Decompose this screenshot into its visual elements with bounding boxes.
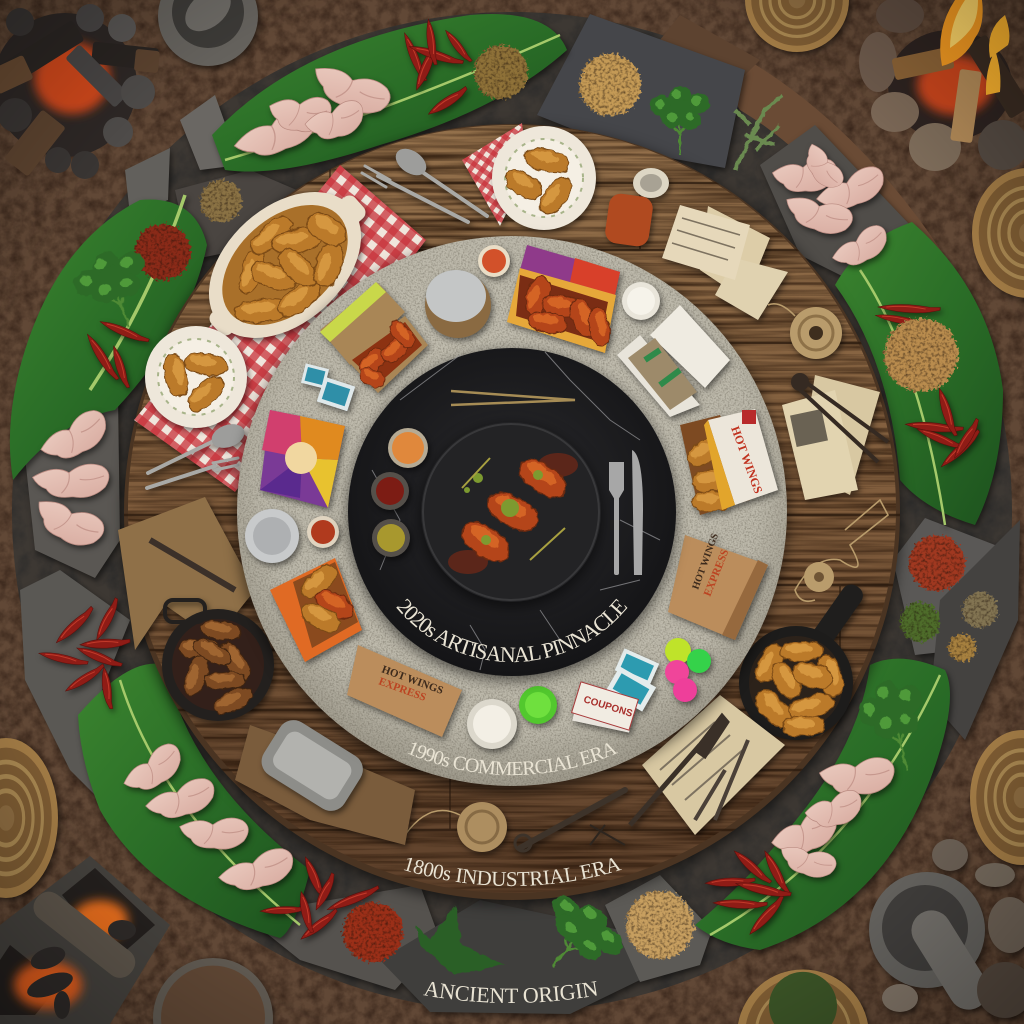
cast iron pan with wings [162, 600, 274, 721]
chilies: right upper [875, 302, 940, 328]
charcoal fire top left [0, 4, 160, 179]
kraft paper bag lower: HOT WINGS [380, 664, 445, 697]
coupons: COUPONS [582, 694, 634, 720]
raw wings groups [29, 48, 896, 892]
metal lunch box [256, 714, 369, 817]
hot wings express box [680, 409, 778, 515]
chilies: right [905, 387, 983, 469]
raw wings: top leaf [229, 48, 395, 162]
colourful box with red wings [507, 245, 620, 353]
white and green sauce cups [467, 686, 557, 749]
second newspaper and tools [630, 695, 785, 835]
twine spool top right [768, 304, 842, 359]
leaf: lower right [695, 659, 950, 950]
charcoal stone stove bottom left [0, 856, 170, 1024]
chilies: bottom [260, 855, 381, 942]
chilies: bottom right [705, 847, 791, 937]
leaf: lower left [78, 664, 310, 938]
fresh herbs [67, 86, 939, 994]
plated artisanal wings [448, 453, 578, 574]
kraft paper bag lower: EXPRESS [377, 676, 428, 704]
dish of fried tenders [181, 163, 389, 367]
open wing box tan lid [320, 282, 428, 393]
cutlery on the wood [147, 143, 487, 488]
orange wing box lower left [270, 558, 362, 662]
chilies: left [38, 598, 130, 709]
purple swirl box [260, 410, 345, 508]
twine and wire on the wood [795, 500, 888, 601]
era label: 1990s commercial era: 1990s COMMERCIAL ERA [408, 742, 618, 776]
label: hot wings: HOT WINGS [728, 424, 766, 496]
kraft paper bag right: HOT WINGS [690, 532, 721, 591]
wooden disc: 1800s industrial era [120, 120, 900, 900]
leaf: top [212, 14, 567, 172]
white sauce cup [622, 282, 660, 320]
old newspaper and pliers [782, 373, 888, 500]
top plate with tenders [492, 126, 596, 230]
twine spool bottom [405, 802, 507, 852]
red gingham tablecloth [134, 123, 528, 492]
old scissors [515, 790, 625, 851]
chilies: top [402, 19, 472, 117]
era label: 1800s industrial era: 1800s INDUSTRIAL ERA [404, 858, 622, 886]
stone mortar and pestle bottom right [869, 839, 1024, 1018]
black marble disc: 2020s artisanal pinnacle [348, 348, 676, 676]
campfire top right [859, 0, 1024, 171]
neon game tokens [665, 638, 711, 702]
kraft paper bag right: EXPRESS [702, 548, 731, 598]
fine dining fork and knife [609, 450, 643, 575]
coupons [572, 648, 659, 733]
blue sauce packets [301, 363, 355, 411]
raw wings: lower right leaf [767, 748, 896, 887]
terrazzo disc: 1990s commercial era [237, 236, 787, 786]
foil lid and red sauce cup [245, 509, 339, 563]
leaf: right [835, 222, 1003, 525]
left plate with tenders [145, 326, 247, 428]
foil cup and red sauce [425, 245, 510, 338]
slate serving plate [421, 422, 601, 602]
chilies: upper left [85, 317, 149, 389]
raw wings: lower left leaf [116, 741, 295, 892]
sauce jar [604, 168, 669, 248]
raw wings: right slate [770, 138, 892, 270]
era label: 2020s artisanal pinnacle: 2020s ARTISANAL PINNACLE [396, 598, 628, 662]
open white snack box [617, 305, 730, 417]
spice powder piles [135, 45, 998, 962]
leaf: upper left [10, 195, 207, 480]
artisan sauce dishes [371, 428, 428, 557]
cast iron skillet with wings [739, 581, 867, 740]
burlap sacks [118, 497, 415, 845]
raw wings: left slate [29, 408, 112, 559]
era label: ancient origin: ANCIENT ORIGIN [423, 981, 597, 1003]
tweezers [451, 391, 575, 405]
recipe notes [662, 205, 788, 320]
kraft paper bag right [668, 532, 768, 640]
kraft paper bag lower [347, 645, 462, 737]
